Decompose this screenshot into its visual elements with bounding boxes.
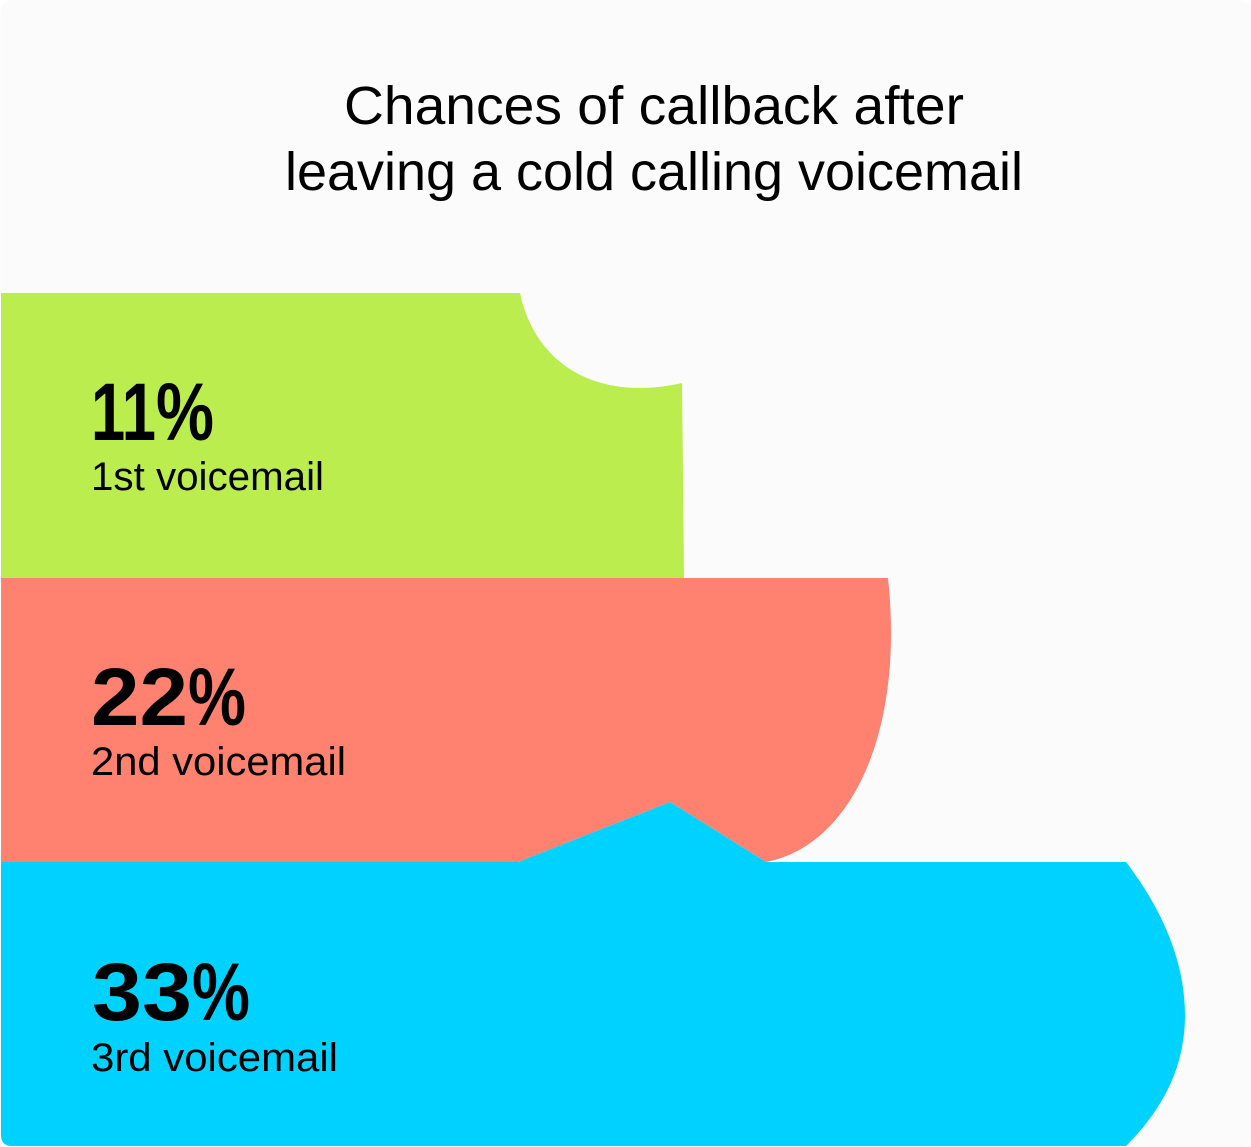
title xyxy=(285,76,1023,202)
value 33%: 33 xyxy=(92,947,192,1038)
red shape xyxy=(1,578,891,862)
value 33%: % xyxy=(192,947,250,1038)
value 22%: % xyxy=(188,652,246,743)
green shape xyxy=(1,293,684,578)
title: Chances of callback after xyxy=(344,76,964,136)
value 11%: % xyxy=(156,367,214,458)
blue shape xyxy=(1,802,1185,1146)
band: 1st voicemail xyxy=(1,293,684,578)
band: 2nd voicemail xyxy=(1,578,891,862)
title: leaving a cold calling voicemail xyxy=(285,142,1023,202)
value 22%: 22 xyxy=(91,652,188,743)
band: 3rd voicemail xyxy=(1,802,1185,1146)
label 2nd voicemail: 2nd voicemail xyxy=(91,740,346,784)
value 11%: 11 xyxy=(91,367,156,458)
label 1st voicemail: 1st voicemail xyxy=(91,455,324,499)
label 3rd voicemail: 3rd voicemail xyxy=(91,1036,338,1080)
